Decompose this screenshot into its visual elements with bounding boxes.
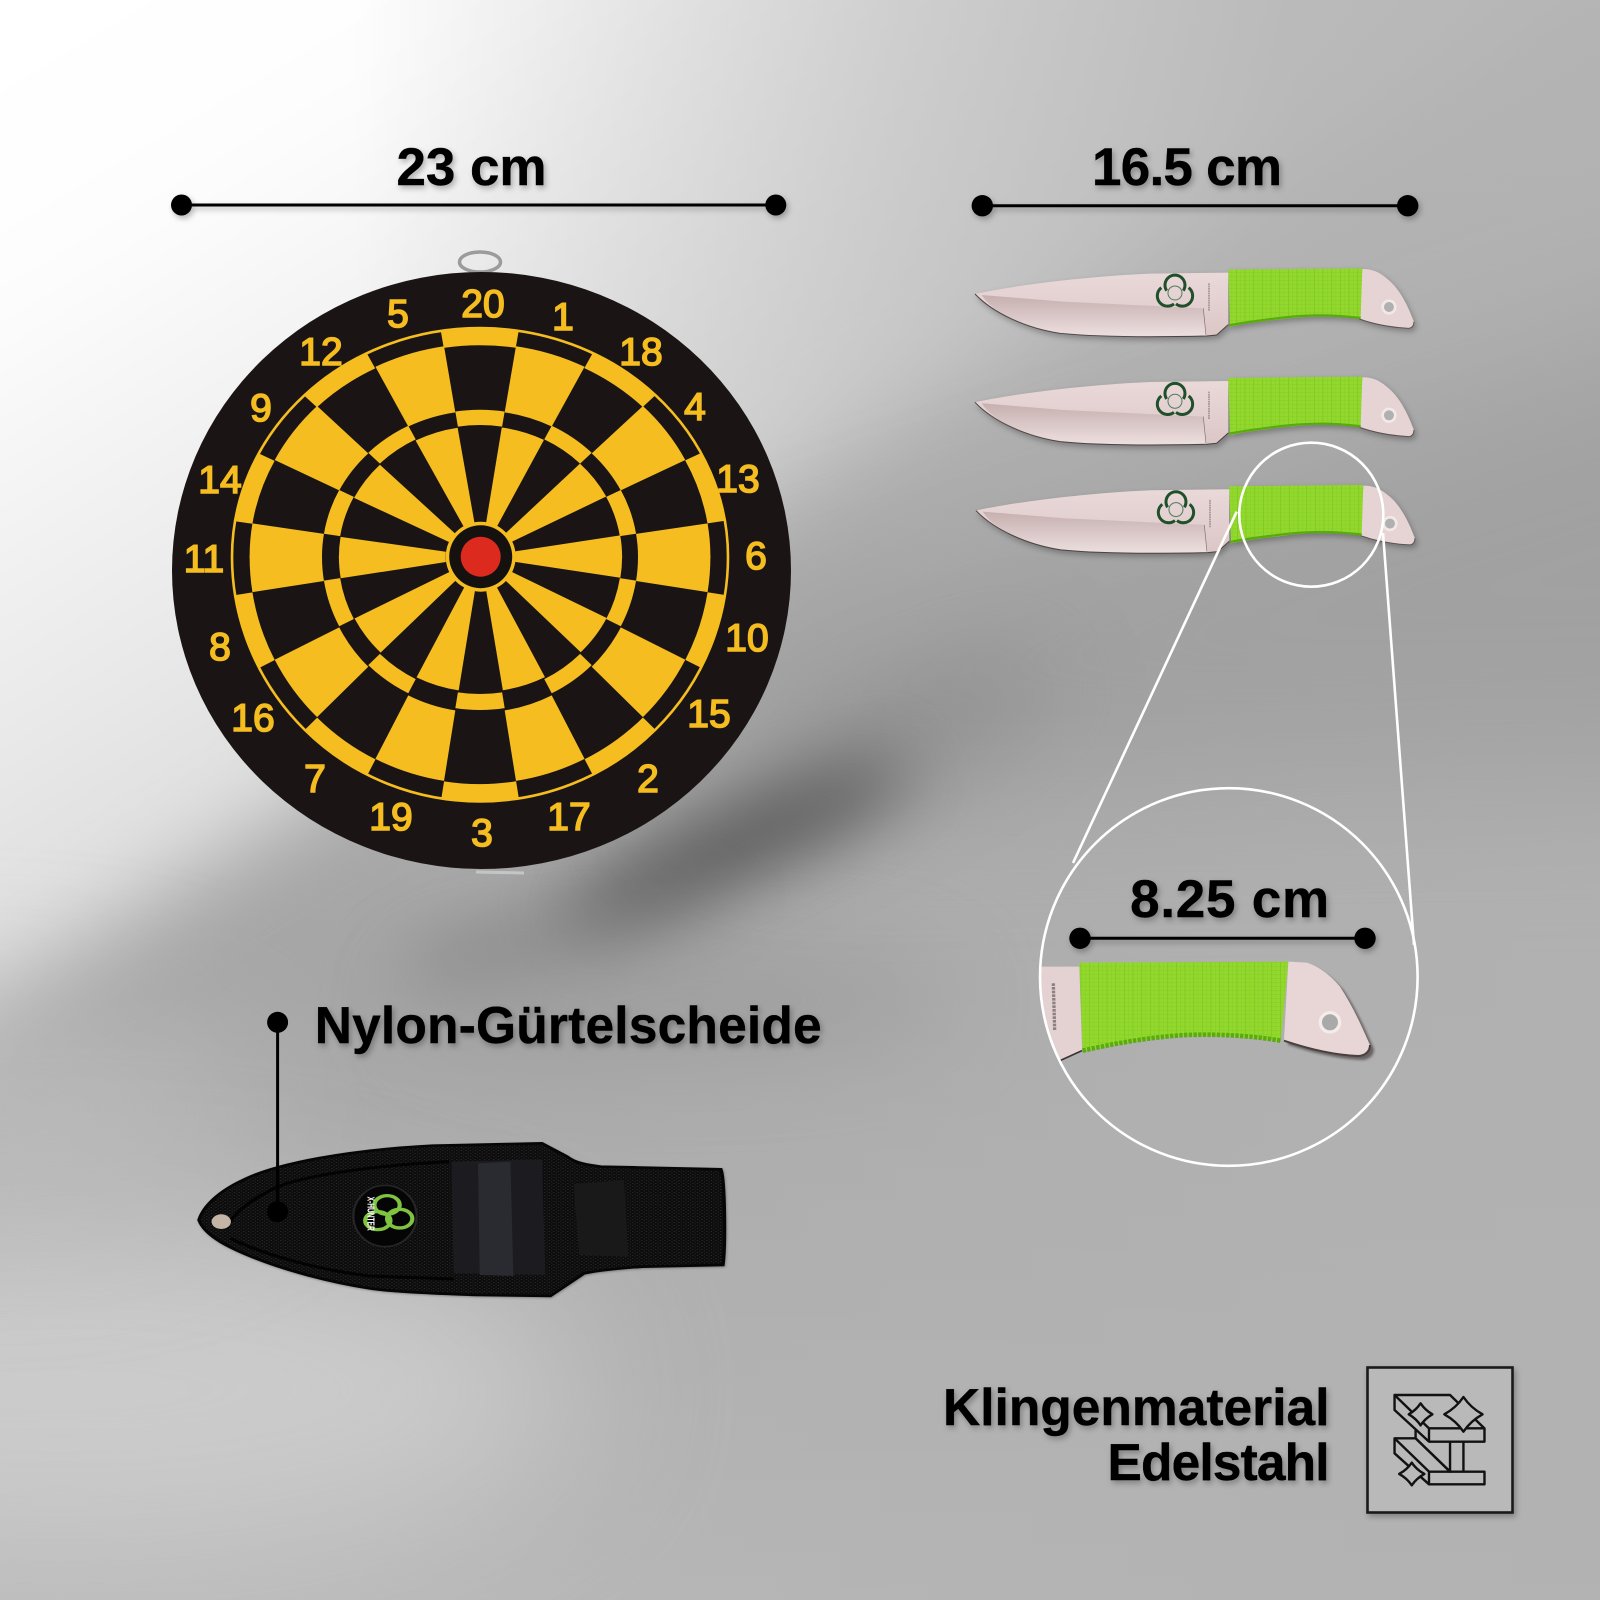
- magnifier connector and circles: [1040, 443, 1418, 1166]
- measure line: [972, 195, 1418, 216]
- label 16.5 cm: 16.5 cm: [1092, 138, 1282, 197]
- logo text: X-HUNTER: [365, 1197, 377, 1231]
- board numbers: 11: [184, 538, 224, 581]
- inner seam: [226, 1162, 454, 1279]
- bull red: [461, 537, 501, 577]
- lower half segments: [236, 556, 724, 800]
- label 8.25 cm: 8.25 cm: [1130, 870, 1329, 929]
- knife 1: [975, 268, 1414, 337]
- board numbers: 13: [716, 458, 760, 501]
- board numbers: 12: [299, 331, 343, 374]
- board numbers: [184, 283, 769, 855]
- box: [1368, 1368, 1512, 1512]
- dimension: 23 cm: [171, 138, 786, 216]
- small lens circle: [1239, 443, 1383, 587]
- zoomed handle detail: [1041, 962, 1376, 1062]
- board numbers: 14: [198, 459, 242, 502]
- pocket panel: [451, 1159, 545, 1275]
- measure line: [1069, 928, 1376, 949]
- label 23 cm: 23 cm: [396, 138, 546, 197]
- material label: [943, 1378, 1330, 1491]
- logo patch: [353, 1185, 417, 1247]
- board numbers: 10: [725, 617, 769, 660]
- pocket stripe: [478, 1162, 513, 1276]
- Klingenmaterial: Klingenmaterial: [943, 1378, 1330, 1436]
- board numbers: 18: [619, 331, 663, 374]
- dartboard: [172, 252, 791, 873]
- measure line: [171, 194, 786, 216]
- bull yellow ring: [446, 522, 516, 592]
- board numbers: 4: [684, 386, 706, 429]
- leader line: [267, 1012, 288, 1222]
- board numbers: 17: [547, 796, 591, 839]
- throwing knives: [975, 268, 1415, 553]
- board numbers: 3: [471, 812, 493, 855]
- board numbers: 9: [250, 387, 272, 430]
- dimension: 16.5 cm: [972, 138, 1418, 216]
- bottom clip: [476, 872, 524, 873]
- nylon sheath: [199, 1143, 725, 1296]
- Edelstahl: Edelstahl: [1108, 1433, 1330, 1491]
- label: Nylon-Gürtelscheide: [315, 996, 822, 1054]
- dimension: 8.25 cm: [1069, 870, 1376, 949]
- large lens circle: [1040, 788, 1418, 1166]
- bull black: [449, 525, 512, 588]
- upper half segments: [236, 329, 724, 558]
- board numbers: 19: [369, 796, 413, 839]
- board numbers: 15: [687, 693, 731, 736]
- callout: Nylon-Gürtelscheide: [267, 996, 822, 1222]
- board numbers: 16: [231, 697, 275, 740]
- board numbers: 1: [552, 296, 574, 339]
- hanging ring: [460, 252, 500, 272]
- board numbers: 7: [304, 758, 326, 801]
- knife 3: [976, 485, 1415, 553]
- board body: [172, 272, 791, 869]
- knife 2: [975, 377, 1414, 445]
- board numbers: 20: [461, 283, 505, 326]
- outer wire ring: [232, 328, 728, 801]
- steel I-beam with stars: [1395, 1395, 1484, 1485]
- belt strap: [574, 1180, 628, 1257]
- connector right: [1383, 533, 1414, 945]
- board numbers: 6: [745, 535, 767, 578]
- board numbers: 2: [637, 758, 659, 801]
- biohazard rings: [365, 1196, 412, 1230]
- sheath body: [199, 1143, 725, 1296]
- icon: steel beam box: [1368, 1368, 1512, 1512]
- connector left: [1073, 512, 1237, 863]
- rivet: [212, 1214, 231, 1229]
- board numbers: 8: [209, 626, 231, 669]
- board numbers: 5: [387, 293, 409, 336]
